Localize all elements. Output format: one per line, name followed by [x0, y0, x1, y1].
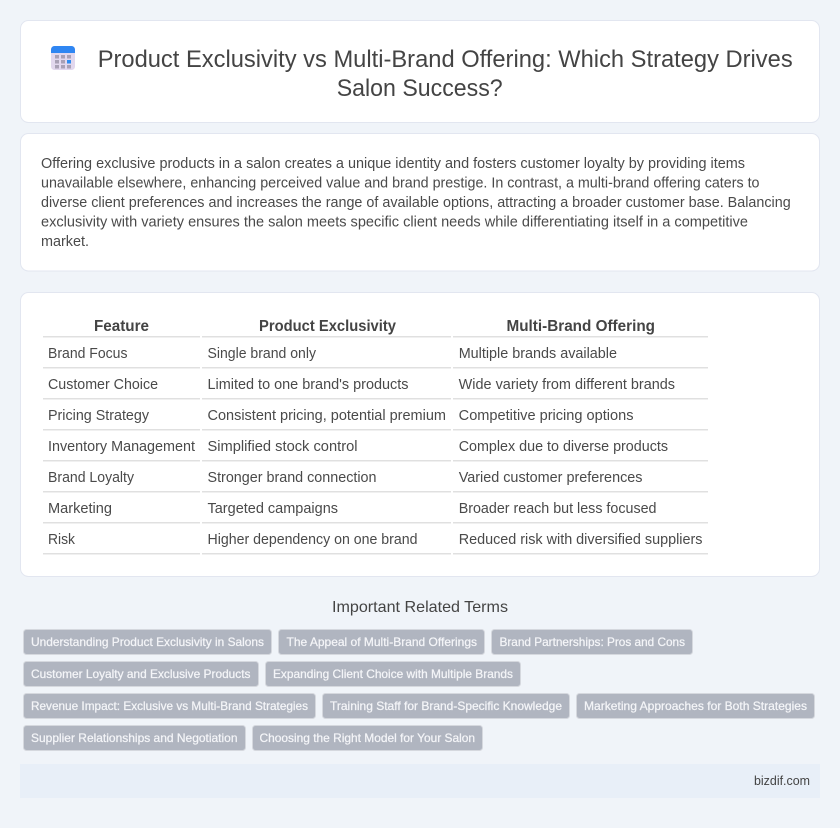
table row: Customer Choice: [48, 377, 675, 393]
tag: Choosing the Right Model for Your Salon: [260, 731, 475, 745]
footer: [20, 764, 820, 798]
tag: [24, 630, 272, 654]
table row: Brand Loyalty: [48, 470, 642, 486]
table header: [94, 318, 655, 335]
tag: Supplier Relationships and Negotiation: [31, 731, 238, 745]
table row: Inventory Management: Complex due to diverse products: [459, 439, 668, 455]
tag: Marketing Approaches for Both Strategies: [584, 699, 807, 713]
text block: introduction paragraph: diverse client preferences and increases the range of available options, attracting a broader customer base. Balancing: [41, 195, 791, 211]
title: Product Exclusivity vs Multi-Brand Offering: Which Strategy Drives: [98, 46, 793, 73]
panel: comparison table: [20, 292, 820, 576]
tag: Brand Partnerships: Pros and Cons: [500, 635, 685, 649]
tag: Training Staff for Brand-Specific Knowledge: [330, 699, 562, 713]
table row: Marketing: Targeted campaigns: [208, 501, 338, 517]
table row: Pricing Strategy: Competitive pricing options: [459, 408, 634, 424]
table row: Inventory Management: [48, 439, 668, 455]
tag: [266, 662, 520, 686]
table row: Customer Choice: Customer Choice: [48, 377, 158, 393]
text block: introduction paragraph: market.: [41, 234, 89, 250]
table row: Pricing Strategy: Consistent pricing, potential premium: [208, 408, 446, 424]
table row: Brand Focus: Single brand only: [208, 346, 317, 362]
table row: Risk: Higher dependency on one brand: [208, 532, 418, 548]
title: [98, 46, 793, 102]
tag: [252, 726, 482, 750]
table header: Multi-Brand Offering: [506, 318, 655, 335]
tag: Expanding Client Choice with Multiple Brands: [273, 667, 513, 681]
heading: important related terms: Important Related Terms: [332, 599, 508, 616]
table header: Product Exclusivity: [259, 318, 396, 335]
tag: [24, 662, 258, 686]
table row: Customer Choice: Limited to one brand's products: [208, 377, 408, 393]
table row: Brand Loyalty: Brand Loyalty: [48, 470, 135, 486]
table row: Brand Focus: Multiple brands available: [459, 346, 617, 362]
tag: [24, 694, 316, 718]
table row: Inventory Management: Inventory Management: [48, 439, 195, 455]
table row: Pricing Strategy: [48, 408, 634, 424]
table row: Pricing Strategy: Pricing Strategy: [48, 408, 150, 424]
tag: [24, 726, 246, 750]
text block: introduction paragraph: exclusivity with variety ensures the salon meets specific client needs while differentiating itself in a competitive: [41, 214, 748, 230]
table row: Marketing: Marketing: [48, 501, 112, 517]
table row: Brand Focus: Brand Focus: [48, 346, 128, 362]
related terms tags: [24, 630, 814, 750]
tag: [492, 630, 692, 654]
text block: introduction paragraph: [41, 156, 791, 250]
text block: introduction paragraph: Offering exclusive products in a salon creates a unique identity and fosters customer loyalty by providing items: [41, 156, 745, 172]
tag: The Appeal of Multi-Brand Offerings: [286, 635, 477, 649]
table row: Risk: [48, 532, 702, 548]
table row: Customer Choice: Wide variety from different brands: [459, 377, 675, 393]
tag: [322, 694, 570, 718]
table header: Feature: [94, 318, 149, 335]
table row: Marketing: [48, 501, 656, 517]
text block: introduction paragraph: unavailable elsewhere, enhancing perceived value and brand prestige. In contrast, a multi-brand offering caters to: [41, 175, 760, 191]
table row: Inventory Management: Simplified stock control: [208, 439, 358, 455]
table row: Brand Loyalty: Varied customer preferences: [459, 470, 642, 486]
icon: calendar: [51, 46, 75, 70]
table row: Brand Focus: [48, 346, 617, 362]
panel: title header: [20, 20, 820, 122]
table row: Marketing: Broader reach but less focused: [459, 501, 656, 517]
tag: Understanding Product Exclusivity in Salons: [31, 635, 264, 649]
tag: Customer Loyalty and Exclusive Products: [31, 667, 250, 681]
tag: Revenue Impact: Exclusive vs Multi-Brand Strategies: [31, 699, 308, 713]
tag: [278, 630, 484, 654]
tag: [576, 694, 814, 718]
table row: Brand Loyalty: Stronger brand connection: [208, 470, 376, 486]
title: Salon Success?: [337, 75, 503, 102]
footer: bizdif.com: [754, 773, 810, 788]
table row: Risk: Risk: [48, 532, 76, 548]
table row: Risk: Reduced risk with diversified suppliers: [459, 532, 702, 548]
panel: introduction: [20, 134, 820, 271]
